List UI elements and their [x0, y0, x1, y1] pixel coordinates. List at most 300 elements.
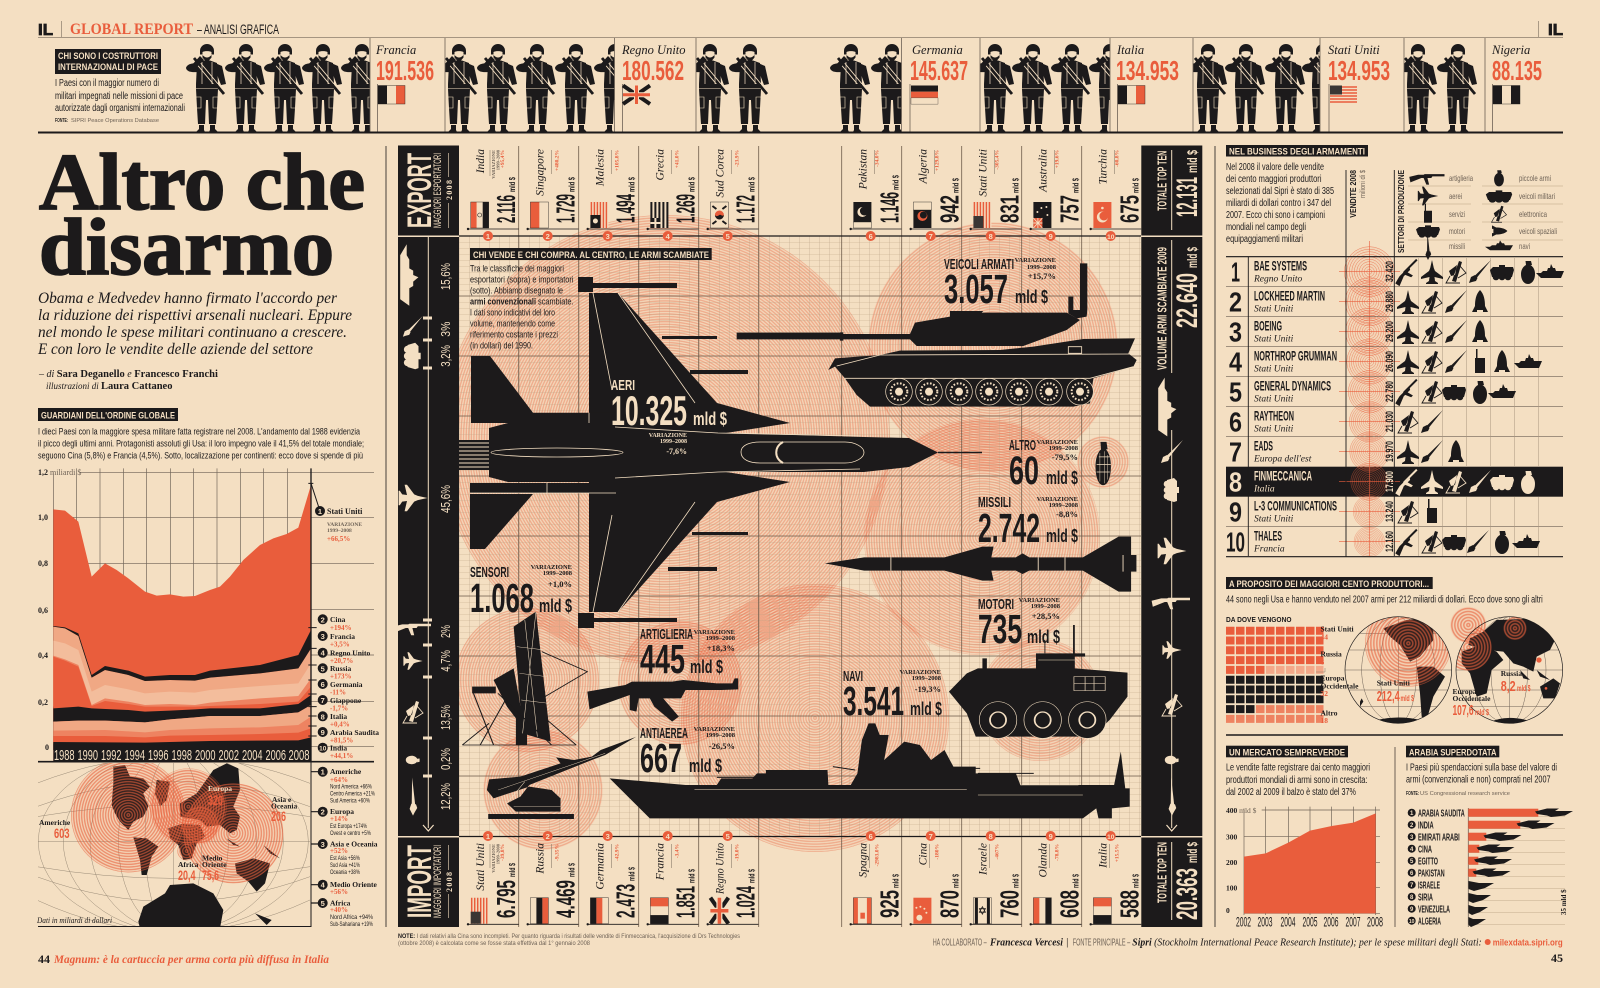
- panel: Italia: Italia: [1116, 43, 1144, 57]
- exporter: Pakistan: 1.146: [875, 192, 905, 223]
- importer: Olanda: Olanda: [1038, 843, 1050, 878]
- exporter: Malesia: +105,8%: [615, 150, 621, 171]
- altro data label: 1999–2008: [1049, 445, 1079, 452]
- antiaerea data label: ANTIAEREA: [640, 725, 688, 742]
- chart intro text: [38, 426, 364, 462]
- exporter: Malesia: mld $: [628, 177, 637, 192]
- globe: Eurasia: [1445, 607, 1563, 730]
- navi data label: 1999–2008: [912, 675, 942, 682]
- sales column header: VENDITE 2008: [1349, 170, 1358, 218]
- tank data label: mld $: [1015, 287, 1048, 307]
- map labels: Africa: [178, 860, 199, 869]
- chart country legend: Germania: [330, 680, 363, 689]
- altro data label: mld $: [1046, 468, 1078, 488]
- panel: Germania: [902, 38, 980, 132]
- importer: Stati Uniti: VARIAZIONE: [491, 844, 496, 873]
- chart country legend: +81,5%: [330, 736, 353, 744]
- chart country legend: -1,7%: [330, 704, 348, 712]
- jet data label: 10.325: [611, 387, 687, 434]
- chart country legend: Giappone: [330, 696, 362, 705]
- chart year labels: 1994: [124, 747, 145, 764]
- map continent legend: Nord America +66%: [330, 784, 372, 790]
- box: import total: TOTALE TOP TEN: [1154, 842, 1170, 903]
- sector legend: motori: [1449, 226, 1465, 236]
- section subtitle: – ANALISI GRAFICA: [197, 22, 279, 37]
- chart year labels: 1992: [101, 747, 122, 764]
- chart country legend: -11%: [330, 688, 346, 696]
- importer: Stati Uniti: Stati Uniti: [475, 843, 487, 891]
- company row 5: 5: [1229, 377, 1242, 408]
- map continent legend: Americhe: [330, 767, 362, 776]
- panel: world spending map: [36, 752, 378, 932]
- company row 3: 3: [1229, 317, 1242, 348]
- chart y axis labels: 0,2: [38, 698, 48, 707]
- volume value: mld $: [1184, 247, 1200, 268]
- importer: Italia: 588: [1115, 890, 1145, 918]
- company row 7: [1229, 437, 1464, 468]
- volume value: 22.640: [1171, 273, 1204, 328]
- globe labels: Occidentale: [1452, 694, 1491, 703]
- artiglieria data label: +18,3%: [707, 643, 735, 653]
- exporter: India: VARIAZIONE: [491, 150, 496, 179]
- companies heading: NEL BUSINESS DEGLI ARMAMENTI: [1229, 146, 1365, 158]
- importer: Spagna: 6: [869, 832, 873, 841]
- exporter: Malesia: [586, 149, 641, 241]
- globe labels: Stati Uniti: [1377, 678, 1410, 688]
- jet data label: 1999–2008: [660, 439, 687, 445]
- map continent legend: 2: [321, 808, 325, 817]
- chart country legend: +194%: [330, 624, 352, 632]
- bar: right weapon share column: [1141, 237, 1204, 836]
- chart country legend: 3: [321, 632, 325, 641]
- map continent legend: Europa: [330, 807, 354, 816]
- importer: Germania: 3: [606, 832, 610, 841]
- saudi bar labels: ARABIA SAUDITA: [1418, 808, 1465, 820]
- map continent legend: 4: [321, 881, 326, 890]
- exporter: Turchia: Turchia: [1098, 149, 1110, 184]
- stacked area chart: [38, 468, 374, 762]
- importer: Italia: [1090, 831, 1145, 926]
- map labels: Americhe: [39, 818, 71, 827]
- company row 1: Regno Unito: [1253, 275, 1303, 285]
- panel: top hundred producers: [1226, 577, 1563, 730]
- chart country legend: +20,7%: [330, 657, 353, 665]
- chart y axis labels: 0,4: [38, 651, 48, 660]
- market axis labels: 200: [1226, 858, 1238, 867]
- company row 4: Stati Uniti: [1254, 365, 1294, 375]
- standfirst: [37, 290, 352, 358]
- company row 2: Stati Uniti: [1254, 305, 1294, 315]
- box: import: 2008: [445, 872, 454, 892]
- center intro text: Tra le classifiche dei maggiori: [470, 264, 564, 274]
- chart y axis labels: 0,6: [38, 606, 48, 615]
- box: import: [398, 838, 459, 927]
- exporter: Stati Uniti: 831: [995, 195, 1025, 223]
- chart y axis labels: [38, 468, 81, 752]
- map labels: 20,4: [178, 867, 196, 883]
- intro text: [55, 78, 185, 124]
- exporter: Turchia: mld $: [1132, 178, 1141, 193]
- producers heading: A PROPOSITO DEI MAGGIORI CENTO PRODUTTORI...: [1229, 579, 1429, 590]
- credits line: |: [1066, 936, 1069, 948]
- tank data label: VEICOLI ARMATI: [944, 256, 1014, 273]
- chart year labels: 2008: [288, 747, 310, 764]
- chart country legend: +173%: [330, 672, 352, 680]
- importer: Italia: Italia: [1098, 843, 1110, 869]
- left bar percentages: 13,5%: [438, 705, 453, 730]
- exporter: Singapore: 1.729: [551, 194, 581, 223]
- sector legend: veicoli spaziali: [1519, 226, 1557, 236]
- missile launcher silhouette: [487, 737, 636, 819]
- antiaerea data label: VARIAZIONE: [694, 726, 735, 733]
- importer: Israele: [970, 831, 1025, 926]
- company row 4: 26.090: [1384, 351, 1396, 372]
- importer: Francia: 4: [666, 832, 671, 841]
- center intro text: [470, 264, 574, 352]
- artiglieria data label: mld $: [690, 657, 723, 677]
- importer: Germania: Germania: [595, 843, 607, 890]
- waffle legend: Occidentale: [1320, 682, 1359, 690]
- missili data label: VARIAZIONE: [1037, 496, 1078, 503]
- saudi bar labels: 6: [1410, 871, 1414, 877]
- left bar percentages: 0,2%: [438, 748, 453, 770]
- sector legend: veicoli militari: [1519, 191, 1555, 201]
- map continent legend: Est Europa +174%: [330, 823, 367, 830]
- map labels: Dati in miliardi di dollari: [36, 916, 113, 925]
- credits line: Francesca Vercesi: [989, 938, 1063, 948]
- chart year labels: 2002: [218, 747, 239, 764]
- exporter: Sud Corea: mld $: [748, 177, 757, 192]
- credits line: [933, 936, 1563, 948]
- exporter: Singapore: mld $: [568, 177, 577, 192]
- missile silhouette: [825, 537, 1136, 592]
- importer: Italia: 10: [1107, 834, 1115, 841]
- exporter: India: India: [475, 149, 487, 174]
- chart country legend: 4: [321, 649, 326, 658]
- box: import total: 20.363: [1171, 868, 1204, 920]
- importer: Israele: 760: [995, 890, 1025, 918]
- importer: Israele: -467%: [995, 844, 1001, 860]
- target circles: [1339, 241, 1400, 557]
- chart country legend: 1999–2008: [327, 528, 352, 534]
- waffle title: DA DOVE VENGONO: [1226, 615, 1292, 624]
- importer: Stati Uniti: 1: [486, 832, 490, 841]
- map labels: Medio: [202, 854, 223, 862]
- market axis labels: 2005: [1302, 914, 1318, 930]
- market axis labels: 2002: [1236, 914, 1251, 930]
- chart country legend: India: [330, 744, 347, 752]
- armored vehicle silhouette: [949, 625, 1128, 738]
- concentric value circles: [440, 215, 1129, 852]
- center heading: CHI VENDE E CHI COMPRA. AL CENTRO, LE ARMI SCAMBIATE: [473, 250, 709, 261]
- artiglieria data label: 1999–2008: [706, 635, 736, 642]
- sales column header: [1349, 170, 1367, 218]
- company row 8: Italia: [1253, 485, 1275, 495]
- sensori data label: SENSORI: [470, 564, 509, 581]
- market text: Le vendite fatte registrare dai cento maggiori: [1226, 762, 1370, 774]
- chart country legend: [315, 506, 379, 760]
- importer: Germania: 2.473: [611, 884, 641, 918]
- sector legend: artiglieria: [1449, 173, 1473, 183]
- box: export total: TOTALE TOP TEN: [1154, 151, 1170, 211]
- exporter: Australia: [1030, 149, 1085, 241]
- exporter: Stati Uniti: 8: [989, 232, 993, 241]
- map continent legend: Sud Asia +41%: [330, 862, 360, 869]
- company row 8: 17.900: [1384, 471, 1396, 492]
- chart year labels: 2000: [195, 747, 216, 764]
- map labels: Oriente: [202, 860, 227, 869]
- altro data label: VARIAZIONE: [1037, 439, 1078, 446]
- credits line: milexdata.sipri.org: [1493, 938, 1563, 948]
- companies intro text: Nel 2008 il valore delle vendite: [1226, 162, 1324, 173]
- companies intro text: dei cento maggiori produttori: [1226, 174, 1322, 185]
- company row 8: [1229, 467, 1535, 498]
- chart year labels: 2004: [242, 747, 262, 764]
- market axis labels: 2008: [1367, 914, 1383, 930]
- exporter: Sud Corea: -23,9%: [735, 150, 741, 167]
- map labels: Oceania: [271, 802, 297, 810]
- waffle legend: 6: [1320, 658, 1324, 666]
- importer: Regno Unito: [706, 831, 761, 926]
- importer: Israele: 8: [989, 832, 993, 841]
- company row 1: [1231, 257, 1564, 288]
- left bar percentages: [438, 263, 453, 810]
- intro text: autorizzate dagli organismi internazionali: [55, 103, 185, 114]
- globe labels: Russia: [1501, 669, 1522, 678]
- map continent legend: +52%: [330, 847, 348, 855]
- artiglieria data label: VARIAZIONE: [694, 629, 735, 636]
- exporter: Pakistan: 6: [869, 232, 873, 241]
- map labels: Asia e: [272, 795, 292, 804]
- chart country legend: 6: [321, 680, 325, 689]
- chart y axis labels: 0,8: [38, 559, 48, 568]
- note: [398, 933, 740, 947]
- left bar percentages: 45,6%: [438, 485, 453, 513]
- waffle legend: Stati Uniti: [1320, 624, 1354, 634]
- chart country legend: 8: [321, 712, 325, 721]
- company row 4: NORTHROP GRUMMAN: [1254, 348, 1337, 364]
- exporter: Algeria: +129,8%: [935, 150, 941, 171]
- importer: Spagna: Spagna: [858, 843, 870, 878]
- chart intro text: seguono Cina (5,8%) e Francia (4,5%). Sotto, localizzazione per continenti: ecco dove si spende di più: [38, 450, 363, 462]
- exporter: Algeria: 942: [935, 195, 965, 223]
- artiglieria data label: ARTIGLIERIA: [640, 626, 693, 643]
- chart year labels: 2006: [266, 747, 286, 764]
- missili data label: -8,8%: [1056, 509, 1078, 519]
- waffle legend: 32: [1320, 689, 1328, 698]
- importer: Olanda: -78,8%: [1055, 844, 1061, 861]
- company row 4: [1229, 347, 1542, 378]
- exporter: India: [467, 149, 521, 241]
- globe labels: mld $: [1517, 683, 1531, 693]
- panel: Regno Unito: [614, 38, 696, 132]
- saudi text: FONTE:: [1406, 791, 1419, 797]
- missili data label: 1999–2008: [1049, 502, 1079, 509]
- assault rifle silhouette: [587, 678, 738, 722]
- row 8 highlight: [1226, 467, 1563, 497]
- company row 5: [1229, 377, 1516, 408]
- tank data label: VARIAZIONE: [1015, 257, 1056, 264]
- chart country legend: Francia: [330, 632, 355, 641]
- globe labels: 8,2: [1501, 679, 1516, 695]
- left bar percentages: 15,6%: [438, 263, 453, 290]
- exporter: Pakistan: -34,0%: [875, 150, 881, 167]
- saudi bar labels: 2: [1410, 823, 1414, 829]
- importer: Germania: mld $: [628, 867, 637, 881]
- right bar icons: [1146, 378, 1196, 816]
- exporter: Algeria: Algeria: [918, 149, 930, 184]
- company row 5: GENERAL DYNAMICS: [1254, 378, 1331, 394]
- globe labels: Europa: [1452, 687, 1477, 696]
- sensori data label: mld $: [539, 596, 572, 616]
- exporter: Stati Uniti: mld $: [1012, 178, 1021, 193]
- box: import: MAGGIORI IMPORTATORI: [432, 845, 444, 918]
- arrow down right: [1166, 825, 1177, 831]
- exporter: Turchia: -60,8%: [1115, 150, 1121, 167]
- exporter: Malesia: 3: [606, 232, 610, 241]
- company row 7: 7: [1229, 437, 1242, 468]
- saudi bar labels: EGITTO: [1418, 856, 1438, 868]
- importer: Stati Uniti: -39,8%: [500, 844, 506, 861]
- sector legend: servizi: [1449, 209, 1465, 219]
- section title: GLOBAL REPORT: [70, 21, 194, 38]
- exporter: Singapore: [526, 149, 581, 241]
- importer: Italia: +15,5%: [1115, 844, 1121, 862]
- chart year labels: 1988: [54, 747, 74, 764]
- map continent legend: Ovest e centro +5%: [330, 830, 371, 837]
- saudi bar labels: VENEZUELA: [1418, 904, 1450, 916]
- importer: Stati Uniti: 1999–2008: [496, 843, 500, 864]
- company row 10: Francia: [1253, 545, 1285, 555]
- exporter: Sud Corea: 1.172: [731, 195, 761, 223]
- byline: [38, 369, 218, 392]
- chart country legend: Stati Uniti: [327, 507, 363, 516]
- jet data label: [611, 377, 727, 456]
- jet data label: mld $: [693, 409, 727, 429]
- chart country legend: +0,4%: [330, 720, 350, 728]
- market heading: UN MERCATO SEMPREVERDE: [1229, 748, 1345, 758]
- exporter: Australia: mld $: [1072, 178, 1081, 193]
- market axis labels: 2006: [1324, 914, 1338, 930]
- globe labels: 107,6: [1452, 703, 1474, 719]
- sector legend: [1404, 157, 1563, 260]
- box: import total: mld $: [1184, 842, 1200, 863]
- exporter: Grecia: Grecia: [655, 149, 667, 181]
- company row 9: [1229, 497, 1437, 528]
- map continent legend: Nord Africa +94%: [330, 914, 373, 921]
- companies intro text: [1226, 162, 1334, 245]
- jet data label: -7,6%: [666, 447, 687, 456]
- panel: Regno Unito: Regno Unito: [621, 43, 686, 57]
- title: Altro che: [39, 139, 365, 227]
- waffle legend: [1316, 624, 1359, 725]
- importer: Israele: mld $: [1012, 874, 1021, 888]
- center intro text: (in dollari) del 1990.: [470, 340, 533, 352]
- map continent legend: 3: [321, 840, 325, 849]
- importer: Stati Uniti: [467, 831, 521, 926]
- tank data label: 3.057: [944, 266, 1008, 312]
- market axis labels: [1226, 806, 1383, 930]
- chart country legend: 5: [321, 664, 325, 673]
- globe labels: 212,4: [1377, 689, 1400, 705]
- header: [38, 21, 1563, 39]
- chart country legend: +3,5%: [330, 640, 350, 648]
- box: import: IMPORT: [401, 845, 439, 918]
- company row 7: 19.970: [1384, 441, 1396, 462]
- exporter: Sud Corea: 5: [726, 232, 730, 241]
- exporter: Singapore: Singapore: [535, 149, 547, 196]
- missili data label: mld $: [1046, 526, 1078, 546]
- intro text: militari impegnati nelle missioni di pace: [55, 91, 183, 102]
- importer: Germania: -42,9%: [615, 844, 621, 861]
- motori data label: MOTORI: [978, 596, 1014, 613]
- map continent legend: Est Asia +56%: [330, 855, 360, 862]
- chart year labels: [54, 747, 310, 764]
- waffle chart: [1226, 627, 1324, 723]
- exporter: Malesia: Malesia: [595, 149, 607, 187]
- company row 9: 13.240: [1384, 501, 1396, 522]
- company row 2: 29.880: [1384, 291, 1396, 312]
- panel: Nigeria: [1485, 38, 1563, 132]
- saudi bar labels: 1: [1410, 811, 1414, 817]
- panel: Stati Uniti: 134.953: [1328, 55, 1390, 86]
- panel: Nigeria: Nigeria: [1491, 43, 1530, 57]
- importer: Spagna: -2983,0%: [875, 844, 881, 866]
- credits line: HA COLLABORATO –: [933, 936, 987, 948]
- importer: Spagna: [850, 831, 905, 926]
- chart country legend: Russia: [330, 664, 352, 673]
- exporter: Australia: +19,6%: [1055, 150, 1061, 168]
- panel: top arms companies: [1226, 145, 1564, 558]
- companies intro text: miliardi di dollari contro i 347 del: [1226, 198, 1331, 209]
- market axis labels: 2007: [1346, 914, 1360, 930]
- panel: Francia: 191.536: [376, 55, 434, 86]
- motori data label: 735: [978, 606, 1022, 652]
- chart country legend: 9: [321, 728, 325, 737]
- byline: – di Sara Deganello e Francesco Franchi: [38, 369, 218, 380]
- saudi bar labels: 10: [1409, 919, 1415, 925]
- exporter: India: +95,4%: [500, 150, 506, 168]
- box: export: 2008: [445, 180, 454, 200]
- company row 10: 12.160: [1384, 531, 1396, 552]
- byline: illustrazioni di Laura Cattaneo: [46, 381, 172, 392]
- jet data label: VARIAZIONE: [649, 433, 687, 439]
- chart year labels: 1998: [172, 747, 192, 764]
- exporter: India: 1999–2008: [496, 149, 500, 170]
- saudi bar labels: EMIRATI ARABI: [1418, 832, 1460, 844]
- artiglieria data label: 445: [640, 636, 685, 682]
- importer: Stati Uniti: mld $: [508, 863, 517, 877]
- chart heading: [38, 408, 178, 422]
- navi data label: NAVI: [843, 668, 863, 685]
- waffle legend: Altro: [1320, 708, 1338, 718]
- saudi bar labels: 9: [1410, 907, 1414, 913]
- motori data label: 1999–2008: [1031, 603, 1061, 610]
- saudi heading: ARABIA SUPERDOTATA: [1409, 748, 1497, 758]
- intro text: I Paesi con il maggior numero di: [55, 78, 159, 89]
- center intro text: riferimento costante i prezzi: [470, 330, 558, 340]
- waffle legend: 18: [1320, 716, 1328, 725]
- tank data label: 1999–2008: [1027, 264, 1057, 271]
- footer left: 44: [38, 952, 50, 966]
- map labels: 206: [271, 808, 286, 824]
- altro data label: 60: [1009, 449, 1039, 493]
- panel: military spending chart: [38, 408, 379, 764]
- box: export: EXPORT: [401, 153, 439, 228]
- importer: Olanda: 608: [1055, 890, 1085, 918]
- center intro text: esportatori (sopra) e importatori: [470, 274, 574, 286]
- box: export: [398, 146, 459, 236]
